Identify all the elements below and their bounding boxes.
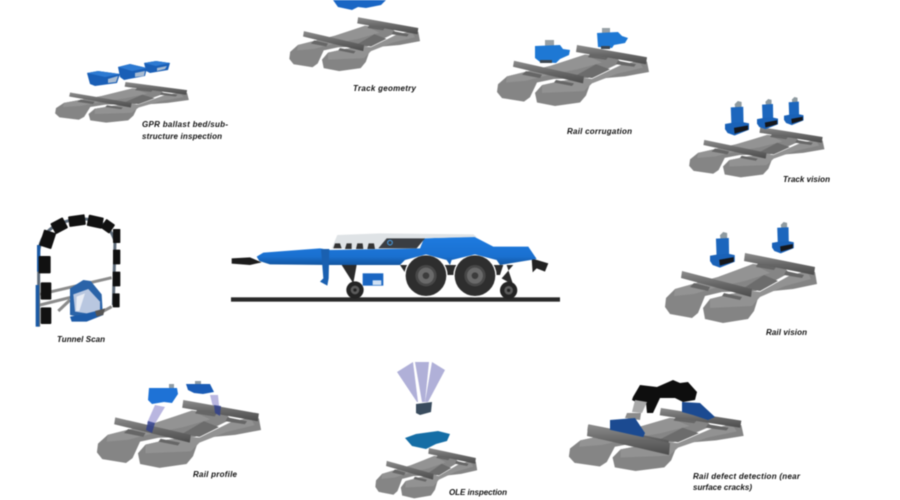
label: GPR: structure inspection: [142, 132, 222, 141]
label: OLE: OLE inspection: [449, 488, 507, 497]
icon: defect sensor left: [610, 418, 645, 438]
track: GPR: [55, 82, 189, 123]
track: geometry: [289, 17, 420, 71]
panel: Track geometry: [289, 0, 420, 93]
label: rail profile: Rail profile: [193, 470, 238, 479]
icon: defect sensor right: [682, 402, 715, 420]
panel: GPR ballast bed inspection: [55, 61, 228, 141]
track: defect: [569, 408, 744, 471]
icon: probe: [625, 413, 641, 420]
label: rail vision: Rail vision: [766, 328, 807, 337]
label: track vision: Track vision: [783, 175, 830, 184]
icon: geometry sensor: [333, 0, 386, 10]
panel: Rail vision: [665, 222, 817, 337]
panel: Track vision: [689, 97, 830, 184]
icon: vision sensors: [725, 97, 804, 136]
panel: OLE inspection: [375, 362, 507, 498]
beam contact: [146, 405, 221, 433]
icon: profile sensors: [148, 381, 214, 404]
track: track vision: [689, 127, 824, 177]
scanner device: [70, 280, 105, 322]
support leg: [320, 249, 329, 286]
beams: [147, 395, 220, 427]
wheels: [404, 254, 448, 297]
crossbars: [40, 278, 112, 318]
icon: OLE sensor: [405, 431, 450, 449]
track: OLE: [375, 448, 477, 498]
chart: central inspection trailer: [231, 233, 560, 302]
coupling: [232, 257, 262, 265]
panel: Tunnel Scan: [37, 214, 120, 327]
frame: tunnel arch: [39, 219, 115, 327]
label: Tunnel Scan: Tunnel Scan: [57, 335, 105, 344]
icon: OLE camera: [416, 402, 432, 415]
track: rail profile: [97, 400, 261, 468]
rear coupling: [532, 258, 548, 272]
SFT box: [363, 273, 383, 286]
body: [257, 233, 537, 265]
panel: Rail profile: [97, 381, 261, 479]
rail over sensors: [587, 425, 670, 455]
icon: robot arm: [632, 380, 697, 413]
track: rail vision: [665, 253, 817, 323]
label: GPR: GPR ballast bed/sub-: [142, 120, 228, 129]
track: corrugation: [497, 45, 649, 106]
panel: Rail defect detection: [569, 380, 801, 492]
label: defect: surface cracks): [693, 483, 752, 492]
icon: corrugation sensors: [535, 28, 628, 63]
icon: GPR sensors: [87, 61, 170, 86]
scanner blocks: [39, 214, 120, 324]
beams: OLE fan: [397, 362, 445, 402]
label: geometry: Track geometry: [353, 84, 417, 93]
label: corrugation: Rail corrugation: [567, 127, 632, 136]
icon: arm bracket: [632, 400, 647, 413]
suspension arms: [342, 265, 513, 285]
ground rail: [231, 297, 560, 302]
label: defect: Rail defect detection (near: [693, 472, 801, 481]
icon: vision sensors: [710, 222, 794, 268]
panel: Rail corrugation: [497, 28, 649, 136]
